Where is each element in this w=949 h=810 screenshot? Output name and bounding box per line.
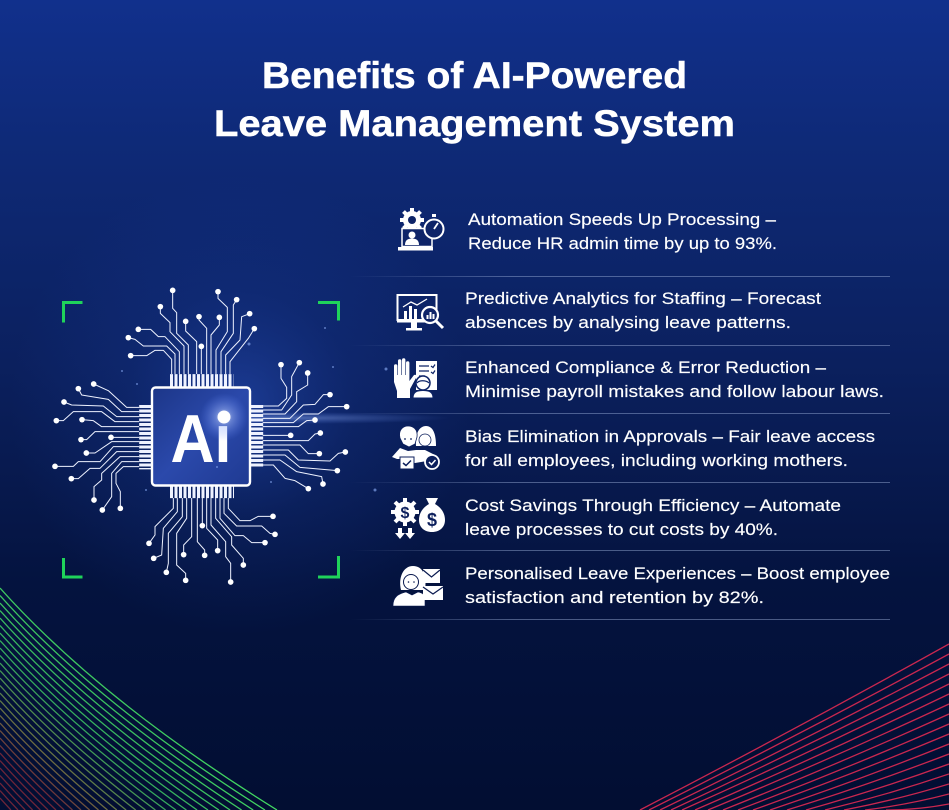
- icon: analytics monitor: [397, 295, 443, 330]
- chip body: [152, 388, 250, 486]
- title: [214, 55, 735, 144]
- benefit 1: [398, 208, 777, 253]
- chip label: Ai: [170, 401, 232, 477]
- icon: two employees with checks: [392, 426, 439, 469]
- text: compliance: Enhanced Compliance & Error Reduction –: [465, 358, 827, 377]
- text: cost savings: Cost Savings Through Efficiency – Automate: [465, 496, 841, 515]
- text: cost savings: leave processes to cut costs by 40%.: [465, 520, 778, 539]
- decorative sparkles: [121, 327, 388, 492]
- lens flare: [200, 393, 248, 441]
- title: Benefits of AI-Powered: [262, 55, 687, 96]
- chip pins: [145, 380, 257, 492]
- text: personalised experiences: satisfaction and retention by 82%.: [465, 588, 764, 607]
- icon: woman with envelopes: [393, 566, 443, 606]
- text: bias elimination: for all employees, including working mothers.: [465, 451, 848, 470]
- text: cost savings: [465, 496, 841, 539]
- icon: gear and money bag: $: [427, 510, 437, 530]
- benefit 2: [397, 289, 821, 332]
- text: predictive analytics: absences by analysing leave patterns.: [465, 313, 791, 332]
- light streak: [150, 412, 450, 424]
- text: automation: Reduce HR admin time by up to 93%.: [468, 234, 777, 253]
- benefit 5: [391, 496, 841, 539]
- title: Leave Management System: [214, 103, 735, 144]
- text: automation: Automation Speeds Up Processing –: [468, 210, 777, 229]
- red curved lines: [640, 644, 949, 810]
- text: bias elimination: [465, 427, 875, 470]
- list dividers: [350, 276, 890, 620]
- icon: gear and money bag: [391, 498, 445, 539]
- text: personalised experiences: Personalised Leave Experiences – Boost employee: [465, 564, 890, 583]
- corner brackets: [64, 302, 338, 577]
- icon: automation stopwatch: [398, 208, 444, 250]
- benefit 3: [394, 358, 884, 401]
- AI chip illustration: [52, 287, 349, 585]
- text: compliance: Minimise payroll mistakes and follow labour laws.: [465, 382, 884, 401]
- benefit 6: [393, 564, 890, 607]
- text: predictive analytics: [465, 289, 821, 332]
- icon: gear and money bag: $: [401, 505, 410, 522]
- text: bias elimination: Bias Elimination in Approvals – Fair leave access: [465, 427, 875, 446]
- benefit 4: [392, 426, 875, 470]
- green curved lines: [0, 588, 277, 810]
- text: personalised experiences: [465, 564, 890, 607]
- text: compliance: [465, 358, 884, 401]
- icon: compliance hand and clipboard: [394, 358, 437, 398]
- trace end dots: [52, 287, 349, 585]
- text: predictive analytics: Predictive Analytics for Staffing – Forecast: [465, 289, 821, 308]
- text: automation: [468, 210, 777, 253]
- circuit traces: [55, 290, 347, 582]
